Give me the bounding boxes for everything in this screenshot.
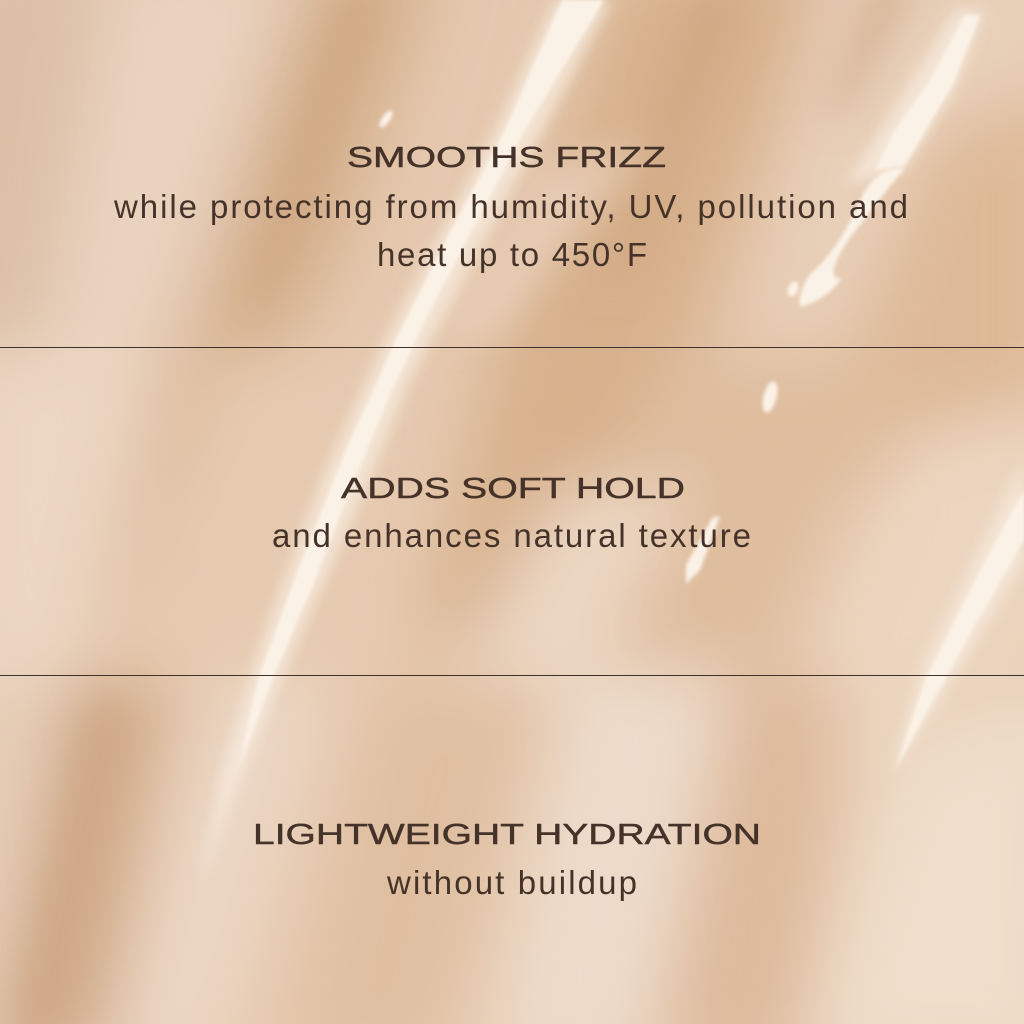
description line 1: while protecting from humidity, UV, pollution and [113,188,908,225]
benefit 2: adds soft hold [272,473,751,554]
benefit 1: smooths frizz [113,142,908,273]
heading: adds soft hold: ADDS SOFT HOLD [341,473,685,505]
benefit 3: lightweight hydration [253,819,761,901]
divider lines [0,348,1024,676]
description: and enhances natural texture [272,517,751,554]
description line 2: heat up to 450°F [377,236,647,273]
highlight streaks [200,0,1024,885]
description: without buildup [386,864,637,901]
heading: lightweight hydration: LIGHTWEIGHT HYDRATION [253,819,761,851]
heading: smooths frizz: SMOOTHS FRIZZ [347,142,666,174]
